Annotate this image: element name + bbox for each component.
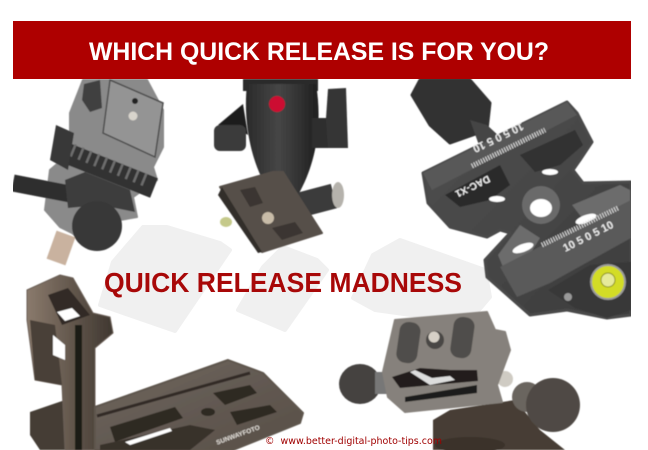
clamp grooves (240, 187, 263, 207)
base plate (95, 360, 303, 450)
ghost plate: middle (238, 247, 327, 330)
mounting plate (103, 80, 163, 157)
top recess (48, 288, 90, 325)
cutout right (542, 169, 558, 175)
banner background (13, 21, 631, 79)
mounting hole (262, 212, 274, 224)
bubble level (220, 217, 232, 227)
ghost quick release plates (100, 227, 490, 331)
slot upper right (213, 385, 257, 405)
cutout lower left (511, 240, 535, 256)
back knob (512, 382, 542, 412)
ribbed rail (66, 153, 154, 188)
bubble ring (601, 273, 615, 287)
cutout left (489, 196, 505, 202)
silver pin (497, 371, 513, 387)
head body (45, 80, 163, 245)
clamp plate (383, 312, 510, 412)
top scale bar (423, 102, 577, 190)
collar (65, 172, 135, 212)
front knob (526, 378, 580, 432)
top knob (412, 80, 490, 143)
knob stem (470, 120, 498, 144)
slot right (230, 405, 277, 425)
level screw (564, 293, 572, 301)
clamp plate (220, 172, 322, 252)
ball head top collar (243, 79, 318, 91)
stud (428, 332, 440, 342)
recess right (520, 130, 583, 172)
photo: DAC-X1 clamp (412, 80, 631, 318)
clamp knob end (332, 182, 344, 208)
left arm (218, 104, 248, 135)
tripod post (56, 234, 66, 262)
clamp knob (296, 196, 334, 206)
level housing (548, 262, 631, 318)
recess lower left (498, 225, 540, 266)
clamp side (218, 187, 262, 253)
top window (57, 308, 80, 321)
bubble level (591, 265, 625, 299)
rail end cap (50, 125, 74, 170)
jaw highlight (410, 370, 455, 385)
upright channel (75, 325, 82, 450)
model label: DAC-X1 (453, 173, 491, 199)
top scale ticks (472, 130, 545, 166)
right pad (449, 316, 476, 359)
bracket upright (27, 275, 113, 450)
plate stud (128, 112, 138, 120)
disc knob (72, 201, 122, 251)
rail ribs (72, 150, 150, 182)
title: WHICH QUICK RELEASE IS FOR YOU? (89, 38, 549, 66)
upper jaw slot (392, 368, 478, 388)
upright dark side (30, 320, 62, 385)
recess lower right (572, 184, 630, 218)
lower scale bar (500, 200, 631, 297)
recess left (445, 165, 510, 207)
plate screw (132, 98, 138, 104)
clamp second groove (272, 222, 303, 240)
white sliver (125, 428, 172, 445)
left knob (339, 364, 381, 404)
photo: pan-tilt tripod head (13, 80, 163, 262)
slot long (110, 407, 183, 442)
clamp body (423, 102, 631, 318)
screw hole (201, 408, 215, 416)
photo: L-bracket (27, 275, 303, 450)
ball head body (246, 84, 319, 195)
side window (53, 335, 65, 360)
brand label: SUNWAYFOTO (215, 424, 261, 447)
slot long lower (100, 425, 215, 450)
small locking knob (82, 80, 102, 112)
photo: small ball head clamp (339, 312, 580, 450)
right lever stem (312, 118, 330, 148)
ghost plate: left (100, 227, 230, 331)
right lever (326, 88, 348, 148)
logo badge (269, 96, 285, 112)
top groove (97, 373, 250, 416)
knob connector (375, 372, 393, 394)
centre hole (530, 199, 552, 217)
stud base (426, 331, 444, 349)
centre ring (522, 186, 560, 224)
photo: ball head with clamp (214, 79, 348, 253)
left foot (30, 400, 100, 450)
left pad (395, 321, 422, 364)
top banner (13, 21, 631, 79)
left knob (214, 125, 246, 151)
headline: quick release madness: QUICK RELEASE MADNESS (104, 267, 462, 298)
footer copyright url: © www.better-digital-photo-tips.com (265, 436, 442, 447)
top scale label: 10 5 0 5 10 (471, 120, 525, 154)
cutout lower right (574, 211, 598, 227)
collar highlight (435, 437, 505, 450)
ghost plate: right (353, 240, 490, 318)
lower scale ticks (542, 208, 618, 245)
lower jaw slot (405, 385, 477, 402)
ball body (433, 400, 565, 450)
lower scale label: 10 5 0 5 10 (561, 219, 616, 255)
handle bar (13, 183, 70, 194)
